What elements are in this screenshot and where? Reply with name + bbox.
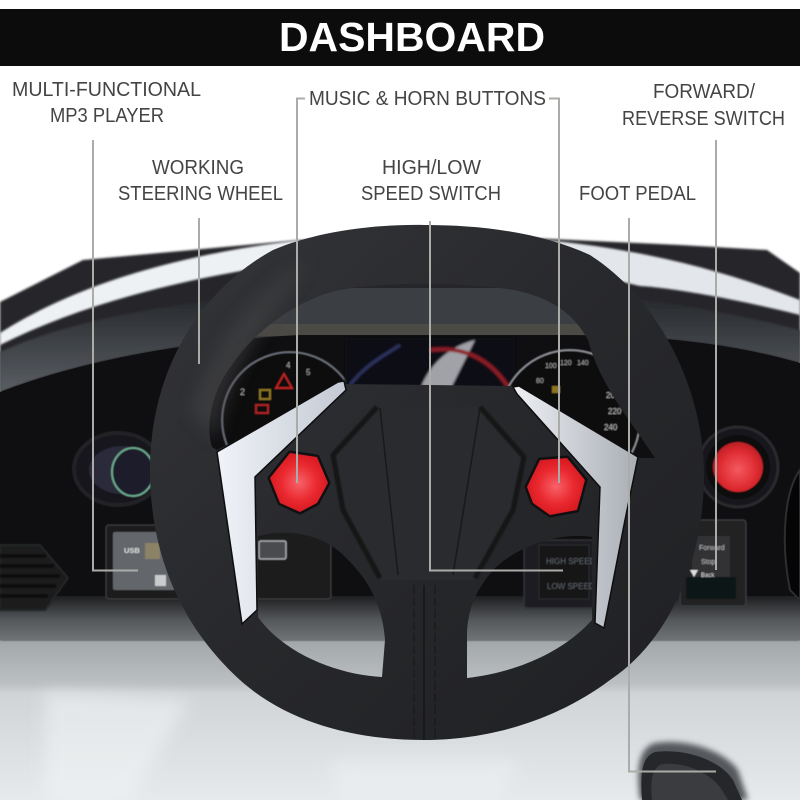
- panel switch: [259, 541, 286, 559]
- left gauge dial: 5: [306, 368, 311, 377]
- header band: [0, 9, 800, 66]
- right silver spoke: [513, 386, 638, 628]
- label: music and horn buttons: MUSIC & HORN BUTTONS: [309, 88, 546, 110]
- label: multi-functional MP3 player: MULTI-FUNCTIONAL: [12, 79, 201, 101]
- label: high low speed switch: SPEED SWITCH: [361, 183, 501, 205]
- leader line: steering wheel: [198, 218, 200, 364]
- left gauge dial: 4: [286, 361, 291, 370]
- label: high low speed switch: [361, 157, 501, 205]
- label: working steering wheel: WORKING: [152, 157, 244, 179]
- dash seam: [210, 324, 600, 336]
- speed switch panel: [524, 540, 596, 608]
- leader line: foot pedal: [629, 218, 716, 772]
- right gauge dial: 100: [545, 363, 557, 370]
- label: forward reverse switch: FORWARD/: [653, 81, 755, 103]
- label: working steering wheel: [118, 157, 283, 205]
- foot pedal: [638, 742, 748, 800]
- label: multi-functional MP3 player: MP3 PLAYER: [50, 105, 164, 127]
- car dashboard background: [0, 238, 800, 800]
- label: foot pedal: FOOT PEDAL: [579, 183, 696, 205]
- label: forward reverse switch: REVERSE SWITCH: [622, 108, 785, 130]
- hub pad creases: [380, 408, 480, 575]
- forward stop back switch: Stop: [701, 559, 716, 566]
- USB panel: [106, 525, 331, 599]
- label: forward reverse switch: [622, 81, 785, 130]
- warning lamps: [276, 374, 292, 388]
- label: working steering wheel: STEERING WHEEL: [118, 183, 283, 205]
- right red button: [527, 458, 585, 515]
- left gauge dial: [222, 352, 358, 488]
- leader line: MP3 player: [93, 140, 138, 570]
- rim highlight: [190, 262, 310, 440]
- right gauge dial: 200: [606, 391, 620, 400]
- forward stop back switch: Forward: [699, 545, 725, 552]
- speed switch panel: LOW SPEED: [547, 582, 595, 591]
- lower sill: [0, 596, 800, 640]
- air vent: [0, 545, 68, 610]
- grey dash band: [0, 292, 800, 392]
- white trim stripe left: [0, 240, 300, 345]
- left silver spoke: [217, 381, 346, 624]
- middle display screen: [345, 338, 515, 390]
- body reflections: [45, 692, 520, 800]
- wheel body: [150, 225, 704, 740]
- title: DASHBOARD: [279, 14, 545, 60]
- right gauge dial: 220: [608, 407, 622, 416]
- lower spoke stitching: [414, 585, 435, 740]
- speed switch panel: HIGH SPEED: [546, 557, 596, 566]
- hub centre pad: [333, 407, 524, 580]
- leader line: music button left: [297, 98, 305, 483]
- right dark recess: [785, 470, 800, 600]
- steering wheel: [150, 225, 704, 740]
- red knob: [698, 427, 778, 507]
- white trim stripe right: [520, 238, 800, 315]
- hub pad side outlines: [333, 407, 524, 578]
- USB panel: USB: [124, 546, 140, 555]
- leader line: horn button right: [549, 98, 559, 483]
- right gauge dial: 240: [604, 423, 618, 432]
- right gauge dial: 120: [560, 360, 572, 367]
- label: multi-functional MP3 player: [12, 79, 201, 127]
- leader line: speed switch: [430, 221, 563, 570]
- forward stop back switch: Back: [701, 573, 715, 579]
- right gauge dial: 80: [536, 378, 544, 385]
- small gauge left: [74, 433, 162, 505]
- left red button: [270, 453, 328, 512]
- car body lower panel: [0, 634, 800, 800]
- right gauge dial: [500, 350, 640, 490]
- left gauge dial: 2: [240, 387, 245, 397]
- dash band inside wheel: [240, 288, 600, 324]
- dashboard roof: [0, 238, 800, 640]
- forward stop back switch: [680, 520, 746, 606]
- dark interior: [0, 335, 800, 600]
- right gauge dial: 140: [577, 360, 589, 367]
- leader line: forward reverse switch: [715, 140, 717, 570]
- label: high low speed switch: HIGH/LOW: [382, 157, 481, 179]
